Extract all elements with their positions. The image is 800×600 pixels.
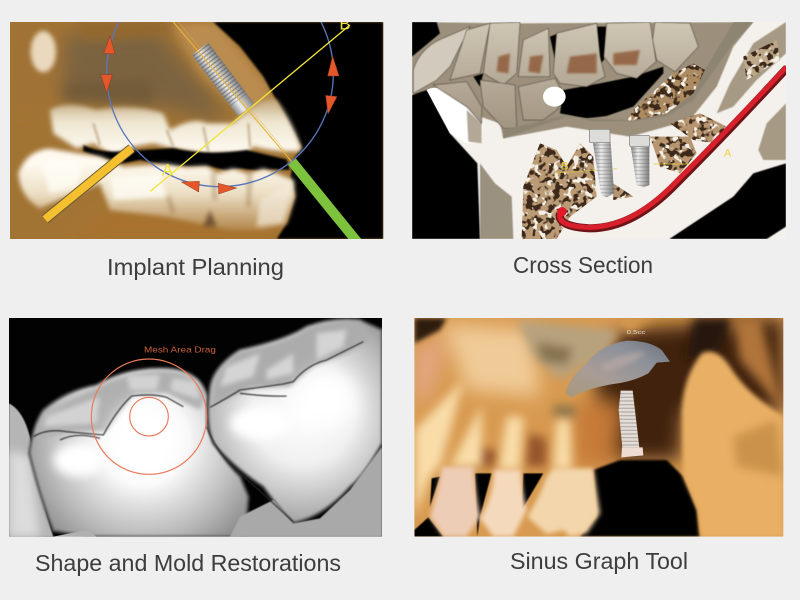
occlusal gap <box>83 145 290 171</box>
alignment lines <box>150 22 350 192</box>
upper teeth <box>50 100 302 155</box>
upper teeth <box>413 22 698 128</box>
left sliver tooth <box>9 403 53 537</box>
caption: implant planning: Implant Planning <box>107 254 284 280</box>
black void <box>580 460 700 537</box>
yellow labels <box>162 14 350 179</box>
yellow labels: B <box>339 14 350 33</box>
black background <box>213 22 383 239</box>
orange direction arrows <box>101 36 339 194</box>
bone background <box>412 22 786 239</box>
volume label: 0.5cc <box>627 330 646 336</box>
caption: shape and mold restorations: Shape and Mold Restorations <box>35 550 341 576</box>
implant <box>192 43 254 116</box>
yellow markers <box>562 149 731 170</box>
panel: implant planning <box>10 22 384 239</box>
trabecular bone <box>522 143 597 240</box>
black regions <box>412 22 786 239</box>
gum ridge <box>503 22 753 138</box>
tooth ridge lines <box>33 342 363 522</box>
panel: sinus graph tool <box>414 318 783 537</box>
mesh drag circles <box>91 359 207 474</box>
red nerve canal <box>557 67 787 228</box>
right bone lobe <box>682 352 783 537</box>
jaw wall <box>480 163 513 239</box>
gum <box>230 447 382 537</box>
sinus implant <box>619 391 643 457</box>
panel: cross section <box>412 22 787 240</box>
right molar <box>208 319 382 523</box>
center molar <box>29 368 248 537</box>
right bone <box>717 22 786 113</box>
lower teeth <box>18 149 295 230</box>
yellow markers: A <box>724 148 732 160</box>
sinus volume <box>565 330 670 398</box>
green handle <box>292 162 358 243</box>
panel: shape and mold restorations <box>9 318 382 537</box>
scan background <box>10 22 383 239</box>
black background <box>9 318 382 537</box>
guide circle <box>106 22 334 188</box>
crowns <box>430 467 480 537</box>
yellow labels: A <box>162 160 174 179</box>
yellow markers: B <box>561 160 568 172</box>
caption: sinus graph tool: Sinus Graph Tool <box>510 548 688 574</box>
gold handle <box>45 148 132 219</box>
dental implants <box>589 129 650 197</box>
mesh label: Mesh Area Drag <box>144 345 216 355</box>
scan background <box>414 318 783 537</box>
caption: cross section: Cross Section <box>513 252 653 278</box>
root shafts <box>415 380 572 517</box>
white filling <box>543 87 566 107</box>
